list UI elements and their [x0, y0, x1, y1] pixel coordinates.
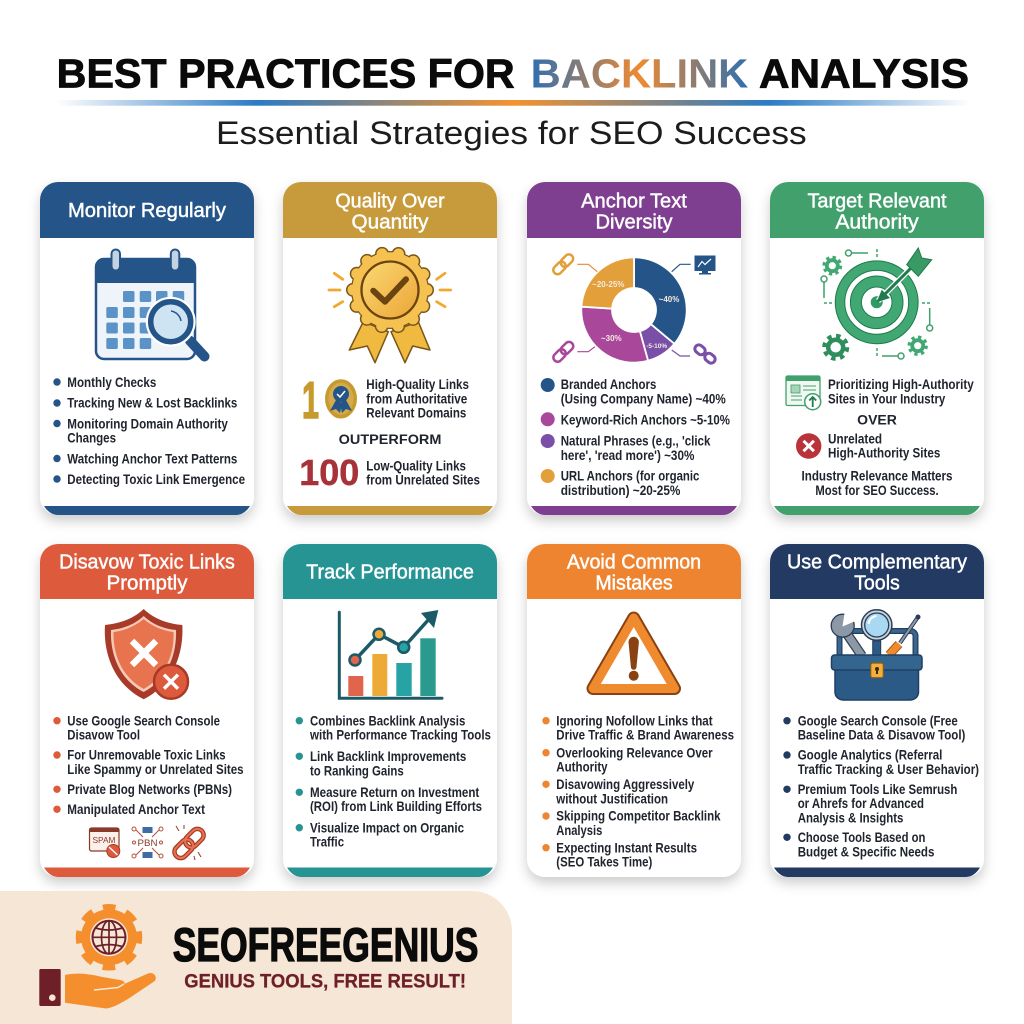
stat: 10 high-quality links: Relevant Domains — [366, 405, 466, 421]
icon: calendar with magnifier — [95, 250, 204, 359]
heading: Mistakes — [595, 573, 673, 595]
legend: Natural Phrases (e.g., 'click — [561, 433, 711, 449]
bullet list: Disavowing Aggressively — [556, 776, 694, 792]
icon: spam: SPAM — [92, 835, 116, 845]
bullet list — [296, 712, 491, 850]
icon: warning triangle — [593, 618, 674, 688]
tagline: GENIUS TOOLS, FREE RESULT! — [184, 970, 466, 992]
legend — [541, 376, 730, 498]
legend: here', 'read more') ~30% — [561, 447, 695, 463]
panel: anchor text diversity — [527, 182, 741, 515]
bullet list: Tracking New & Lost Backlinks — [67, 395, 237, 411]
title: ANALYSIS — [759, 50, 969, 96]
heading — [567, 551, 701, 595]
stat: 10 high-quality links: from Authoritative — [366, 390, 467, 406]
text: conclusion: Industry Relevance Matters — [802, 468, 953, 484]
stat: 100 low-quality links: Low-Quality Links — [366, 457, 466, 473]
panel: use complementary tools — [770, 544, 984, 877]
text: unrelated — [828, 430, 940, 461]
bullet list — [53, 712, 244, 817]
panel: quality over quantity — [283, 182, 497, 515]
label: over: OVER — [857, 412, 897, 427]
bullet list: or Ahrefs for Advanced — [798, 795, 924, 811]
legend: (Using Company Name) ~40% — [561, 390, 726, 406]
icon: red x — [796, 433, 821, 459]
heading — [335, 190, 445, 234]
icon: broken chain — [172, 825, 206, 861]
bullet list: Disavow Tool — [67, 727, 140, 743]
icon: target with arrow — [821, 248, 933, 359]
stat: 10 high-quality links — [302, 372, 469, 430]
icon: gear with globe — [79, 907, 139, 967]
bullet list: Watching Anchor Text Patterns — [67, 450, 237, 466]
heading: Quality Over — [335, 190, 445, 212]
icon: pbn network: PBN — [138, 838, 158, 848]
bullet list: to Ranking Gains — [310, 762, 404, 778]
bullet list: with Performance Tracking Tools — [309, 727, 491, 743]
stat: 100 low-quality links: 100 — [299, 452, 359, 493]
icon: pbn network — [132, 827, 163, 858]
bullet list: Changes — [67, 430, 116, 446]
bullet list: Expecting Instant Results — [556, 839, 697, 855]
bullet list: Detecting Toxic Link Emergence — [67, 471, 245, 487]
brand name: SEOFREEGENIUS — [173, 918, 478, 971]
icon: web page with up arrow — [786, 376, 821, 410]
donut chart: -5-10% — [646, 343, 667, 350]
panel: monitor regularly — [40, 182, 254, 515]
chart: rising bars and line — [339, 610, 442, 698]
heading: Disavow Toxic Links — [59, 551, 235, 573]
legend: Keyword-Rich Anchors ~5-10% — [561, 411, 730, 427]
bullet list: Traffic — [310, 834, 344, 850]
bullet list: Measure Return on Investment — [310, 784, 480, 800]
heading: Diversity — [596, 212, 672, 234]
heading: Use Complementary — [787, 551, 967, 573]
icon: award rosette — [329, 251, 451, 363]
bullet list: Google Analytics (Referral — [798, 747, 942, 763]
text: unrelated: High-Authority Sites — [828, 445, 940, 461]
text: conclusion: Most for SEO Success. — [815, 482, 939, 498]
text: prioritizing — [828, 376, 974, 406]
heading — [59, 551, 235, 595]
stat: 10 high-quality links: 0 — [326, 372, 356, 430]
bullet list: Monitoring Domain Authority — [67, 416, 228, 432]
bullet list: Analysis & Insights — [798, 809, 904, 825]
bullet list: without Justification — [555, 790, 668, 806]
title: BEST PRACTICES FOR — [57, 50, 515, 96]
heading — [808, 190, 947, 234]
icon: spam — [90, 828, 120, 858]
bullet list: Link Backlink Improvements — [310, 748, 466, 764]
heading: Monitor Regularly — [68, 200, 226, 222]
bullet list: (SEO Takes Time) — [556, 854, 652, 870]
heading: Authority — [835, 212, 919, 234]
bullet list: Drive Traffic & Brand Awareness — [556, 727, 734, 743]
bullet list: Traffic Tracking & User Behavior) — [798, 761, 979, 777]
label: outperform: OUTPERFORM — [339, 432, 441, 447]
heading: Quantity — [352, 212, 428, 234]
panel: brand footer — [0, 891, 512, 1024]
donut chart: ~20-25% — [592, 280, 624, 289]
bullet list: Premium Tools Like Semrush — [798, 781, 957, 797]
bullet list — [53, 374, 245, 487]
stat: 10 high-quality links: 1 — [302, 372, 319, 430]
stat: 100 low-quality links — [299, 452, 480, 493]
heading — [787, 551, 967, 595]
bullet list: (ROI) from Link Building Efforts — [310, 798, 482, 814]
bullet list: Use Google Search Console — [67, 712, 220, 728]
heading: Avoid Common — [567, 551, 701, 573]
heading: Target Relevant — [808, 190, 947, 212]
panel: disavow toxic links — [40, 544, 254, 877]
bullet list: Choose Tools Based on — [798, 829, 925, 845]
legend: distribution) ~20-25% — [561, 482, 681, 498]
icon: orange link — [552, 253, 575, 276]
icon: shield with x — [105, 609, 188, 699]
bullet list — [783, 712, 979, 859]
bullet list: Authority — [556, 759, 608, 775]
panel: target relevant authority — [770, 182, 984, 515]
bullet list: Manipulated Anchor Text — [67, 801, 205, 817]
icon: monitor — [694, 256, 716, 274]
bullet list: Analysis — [556, 822, 602, 838]
title — [57, 50, 969, 96]
bullet list: Ignoring Nofollow Links that — [556, 712, 713, 728]
bullet list: Like Spammy or Unrelated Sites — [67, 761, 244, 777]
title: BACKLINK — [531, 50, 748, 96]
donut chart — [552, 253, 717, 365]
heading: Anchor Text — [581, 190, 687, 212]
bullet list: For Unremovable Toxic Links — [67, 747, 226, 763]
legend: URL Anchors (for organic — [561, 468, 700, 484]
bullet list — [542, 712, 734, 870]
legend: Branded Anchors — [561, 376, 657, 392]
bullet list: Google Search Console (Free — [798, 712, 958, 728]
icon: magenta link — [552, 340, 575, 363]
bullet list: Skipping Competitor Backlink — [556, 808, 721, 824]
text: prioritizing: Prioritizing High-Authority — [828, 376, 974, 392]
heading: Track Performance — [306, 561, 474, 583]
title underline — [56, 100, 970, 106]
heading — [581, 190, 687, 234]
heading: Promptly — [106, 573, 188, 595]
icon: toolbox — [831, 610, 922, 700]
text: conclusion — [802, 468, 953, 498]
bullet list: Visualize Impact on Organic — [310, 820, 464, 836]
bullet list: Private Blog Networks (PBNs) — [67, 781, 232, 797]
bullet list: Baseline Data & Disavow Tool) — [798, 727, 965, 743]
donut chart: ~40% — [659, 295, 679, 304]
text: prioritizing: Sites in Your Industry — [828, 390, 945, 406]
subtitle: Essential Strategies for SEO Success — [216, 115, 807, 151]
icon: purple link — [693, 343, 717, 365]
stat: 10 high-quality links: High-Quality Links — [366, 376, 469, 392]
text: unrelated: Unrelated — [828, 430, 882, 446]
bullet list: Budget & Specific Needs — [798, 843, 935, 859]
panel: avoid common mistakes — [527, 544, 741, 877]
bullet list: Monthly Checks — [67, 374, 156, 390]
heading: Tools — [854, 573, 900, 595]
bullet list: Combines Backlink Analysis — [310, 712, 465, 728]
stat: 100 low-quality links: from Unrelated Sites — [366, 472, 480, 488]
donut chart: ~30% — [601, 334, 622, 343]
icon: open hand — [39, 969, 156, 1008]
panel: track performance — [283, 544, 497, 877]
bullet list: Overlooking Relevance Over — [556, 744, 713, 760]
